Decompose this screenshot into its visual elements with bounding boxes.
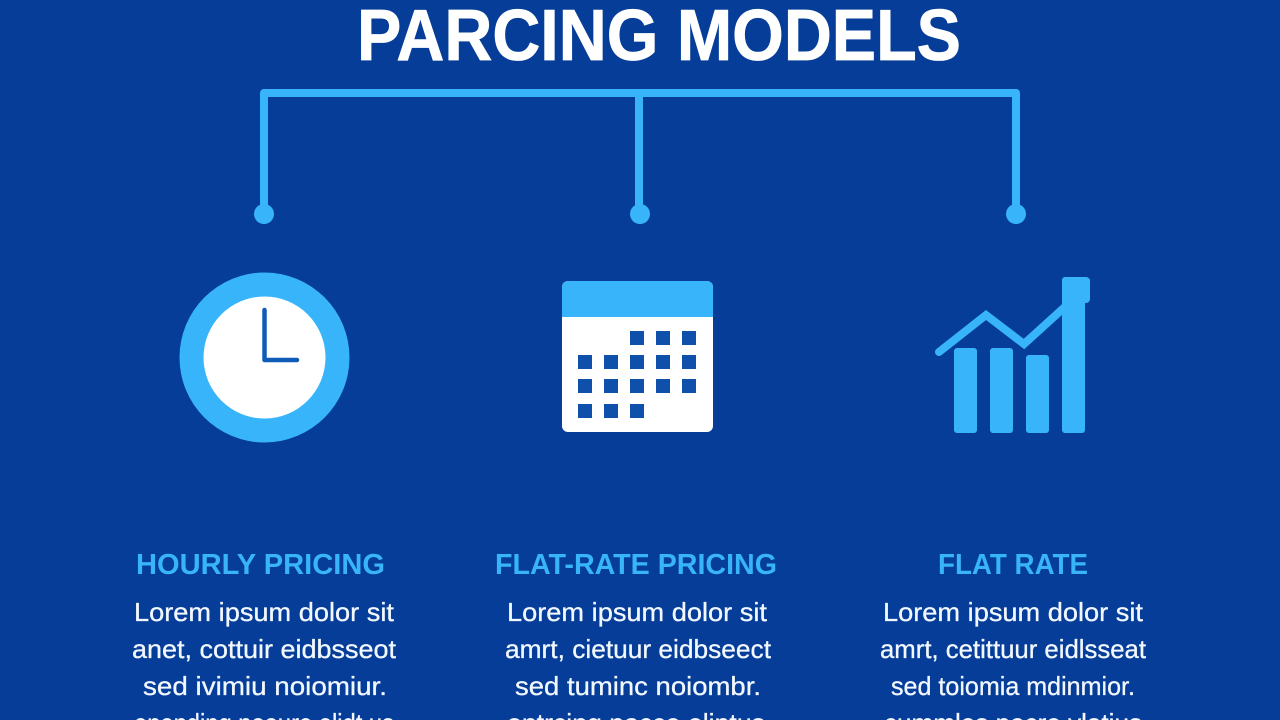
text block: hourly pricing — [132, 597, 397, 720]
text block: flat rate — [880, 597, 1147, 720]
icon: growth chart — [939, 277, 1090, 433]
text block: flat rate: sed toiomia mdinmior. — [891, 671, 1135, 701]
text block: flat-rate pricing: Lorem ipsum dolor sit — [507, 597, 768, 627]
text block: flat-rate pricing: amrt, cietuur eidbseect — [505, 634, 772, 664]
connector bracket — [254, 93, 1026, 224]
column: flat rate — [880, 549, 1147, 720]
column: hourly pricing — [132, 549, 397, 720]
heading: flat rate: FLAT RATE — [938, 549, 1088, 581]
text block: hourly pricing: sed ivimiu noiomiur. — [143, 671, 387, 701]
icon: clock — [180, 272, 350, 442]
text block: flat rate: Lorem ipsum dolor sit — [883, 597, 1144, 627]
text block: flat rate: amrt, cetittuur eidlsseat — [880, 634, 1147, 664]
column: flat-rate pricing — [495, 549, 777, 720]
text block: hourly pricing: Lorem ipsum dolor sit — [134, 597, 395, 627]
text block: flat-rate pricing: sed tuminc noiombr. — [515, 671, 761, 701]
heading: hourly pricing: HOURLY PRICING — [136, 549, 385, 581]
text block: flat-rate pricing — [505, 597, 772, 720]
icon: calendar — [562, 281, 713, 432]
heading: flat-rate pricing: FLAT-RATE PRICING — [495, 549, 777, 581]
text block: hourly pricing: anet, cottuir eidbsseot — [132, 634, 397, 664]
